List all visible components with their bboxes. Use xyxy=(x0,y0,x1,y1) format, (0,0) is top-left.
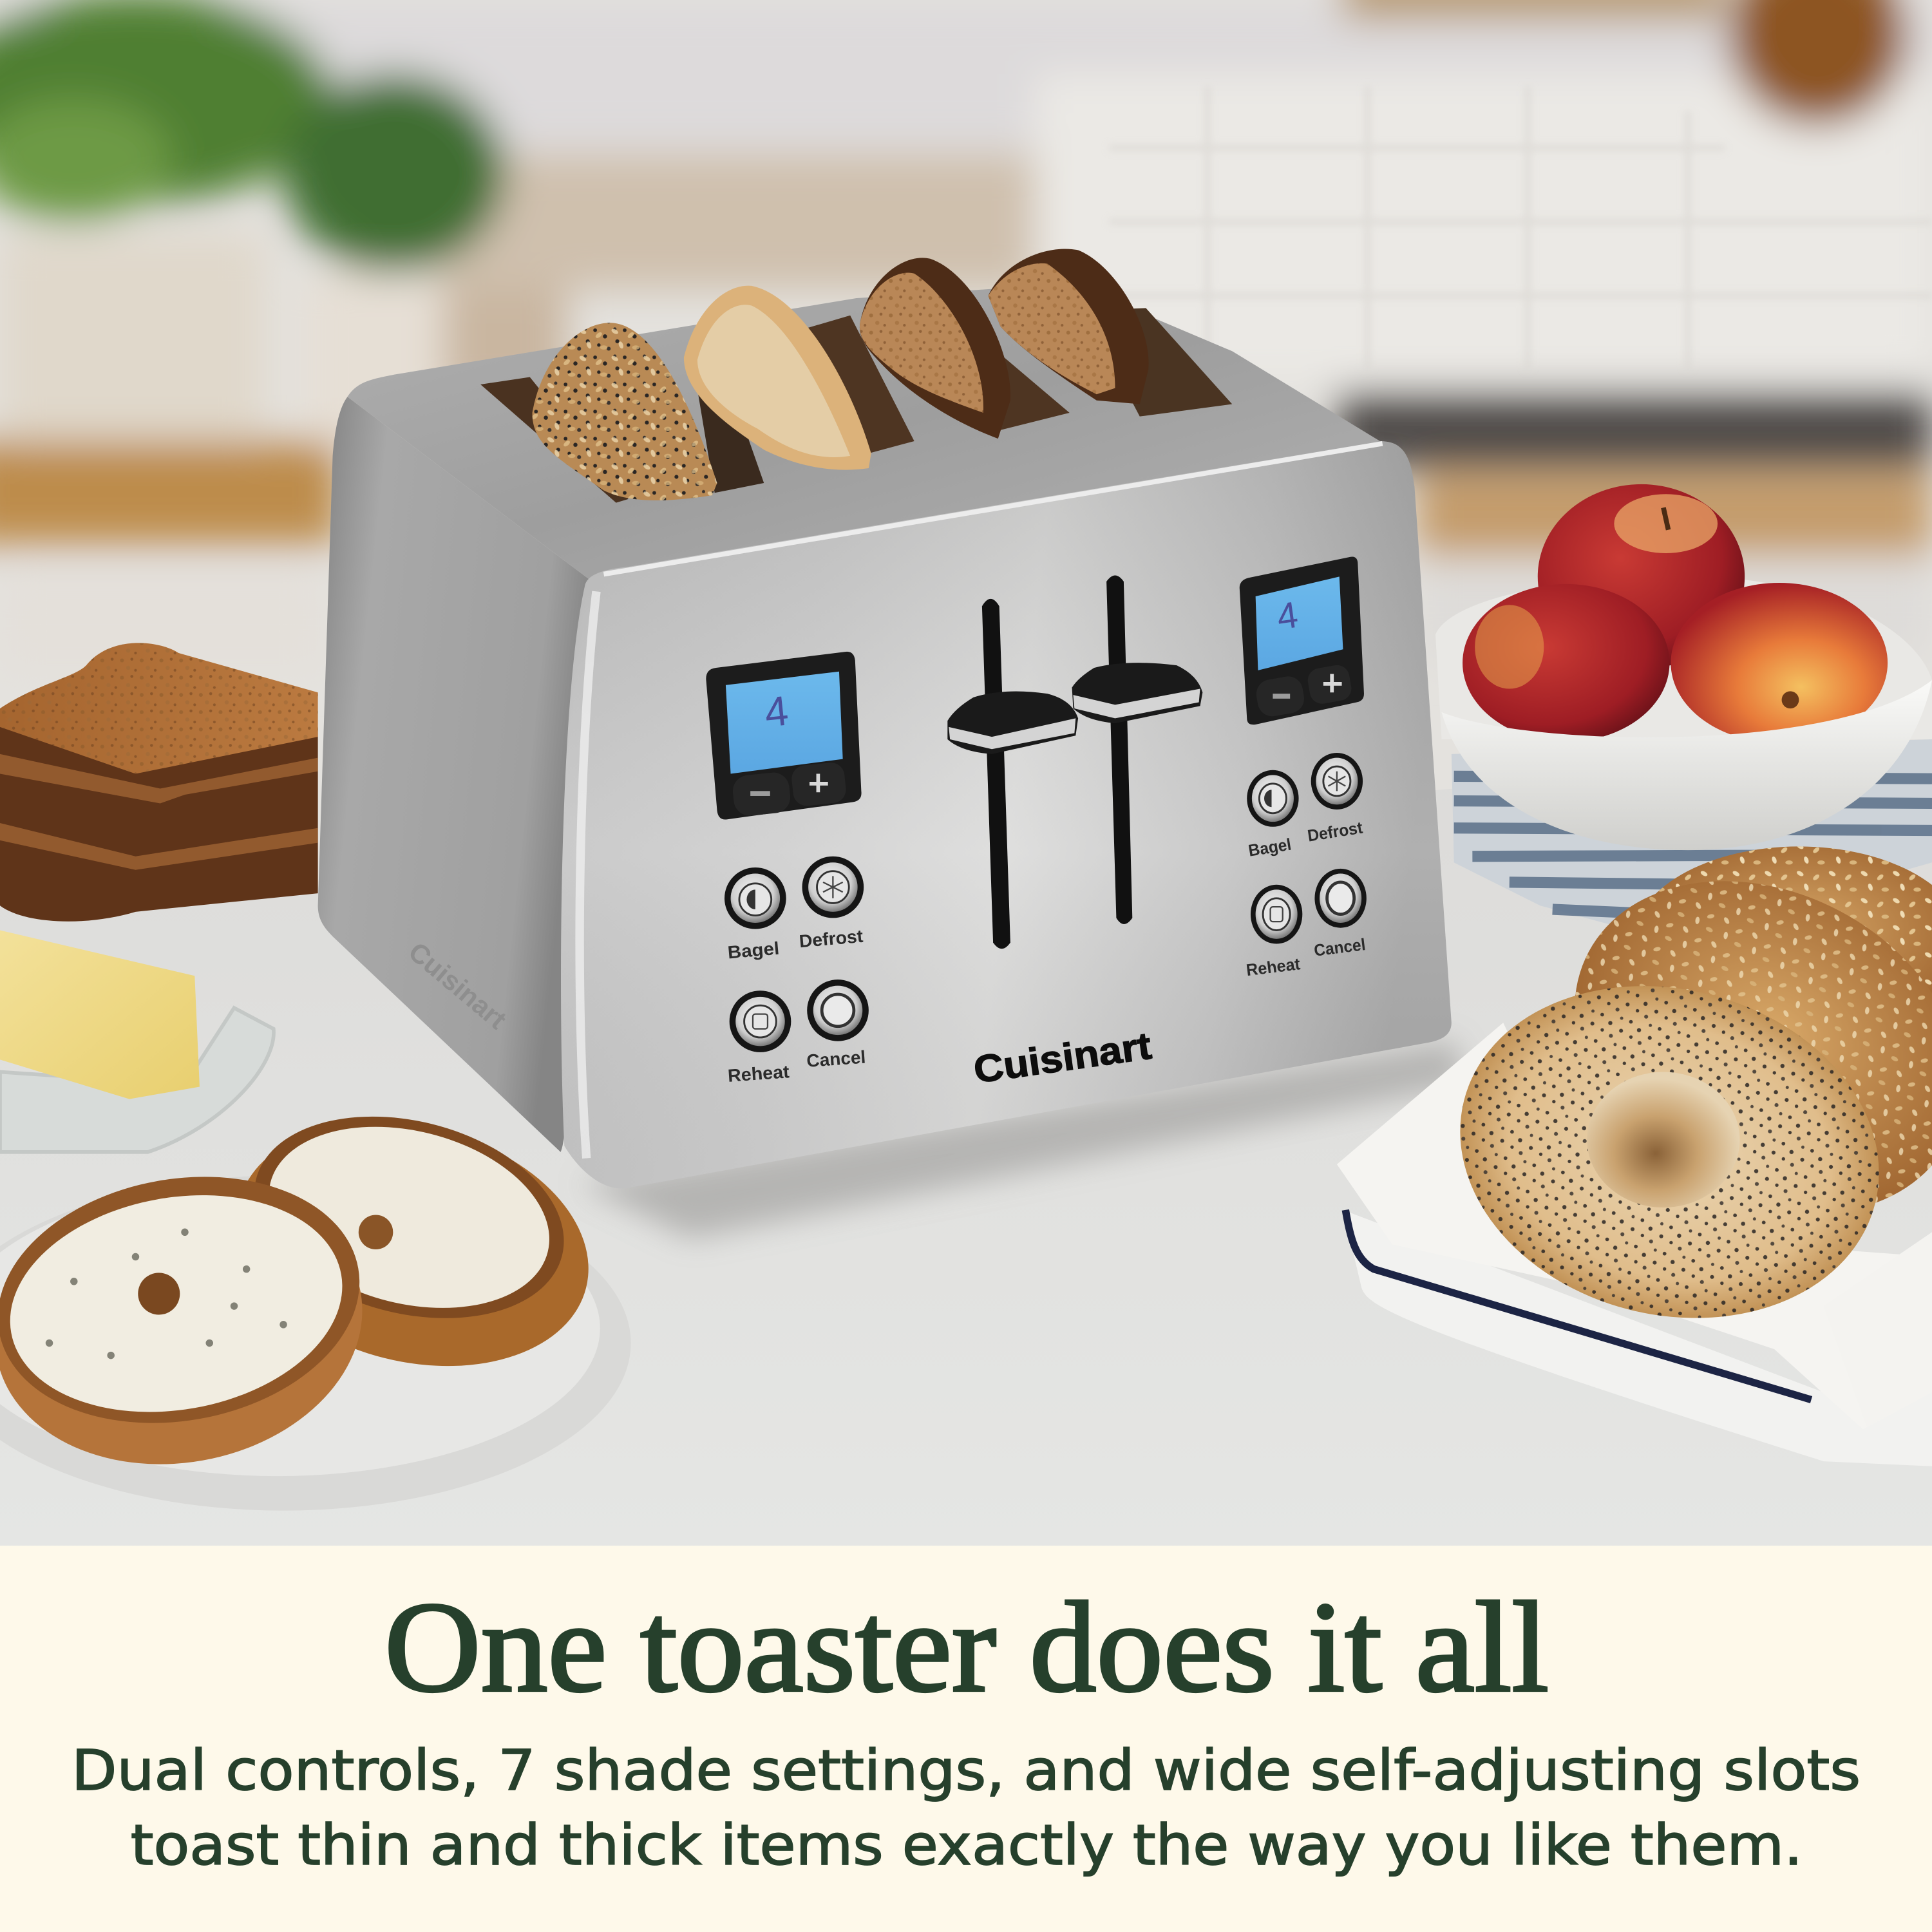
subtitle line 1: Dual controls, 7 shade settings, and wide self-adjusting slots xyxy=(71,1739,1861,1803)
front corner highlight xyxy=(580,591,596,1158)
right display module xyxy=(1240,557,1364,724)
control labels: Bagel xyxy=(1247,836,1293,860)
right Cancel button xyxy=(1314,869,1367,928)
bowl back xyxy=(1435,576,1932,739)
lever handle right xyxy=(1072,663,1202,723)
control labels: Defrost xyxy=(1306,819,1364,846)
left display module xyxy=(706,652,862,820)
left Bagel button xyxy=(724,867,786,929)
countertop xyxy=(0,739,1932,1553)
stack of toast xyxy=(0,643,318,922)
right Defrost button xyxy=(1311,753,1363,810)
slots xyxy=(480,308,1232,503)
left Cancel button xyxy=(807,980,869,1041)
nectarine: left xyxy=(1463,584,1669,742)
left plus button xyxy=(790,761,848,807)
nectarine: top xyxy=(1538,484,1745,669)
Cuisinart logo: Cuisinart xyxy=(971,1024,1154,1092)
wall tiles xyxy=(1109,86,1932,370)
parchment corner xyxy=(1824,1232,1932,1427)
control labels: Cancel xyxy=(1313,936,1367,960)
right Reheat button xyxy=(1251,885,1302,944)
poppy seed bagel xyxy=(1425,943,1915,1361)
right LCD digit: 4 xyxy=(1274,594,1300,638)
left Reheat button xyxy=(730,990,791,1052)
butter dish xyxy=(0,931,274,1152)
toaster front panel xyxy=(561,441,1452,1188)
toaster side panel xyxy=(318,397,589,1152)
lever slot left xyxy=(982,599,1010,949)
toaster shadow xyxy=(579,1041,1466,1238)
top edge highlight xyxy=(604,444,1383,574)
toaster side logo: Cuisinart xyxy=(403,936,513,1035)
right plus button xyxy=(1306,663,1353,706)
plate xyxy=(0,1175,631,1511)
title: One toaster does it all xyxy=(384,1576,1549,1719)
subtitle line 2: toast thin and thick items exactly the way you like them. xyxy=(131,1814,1803,1878)
toaster top panel xyxy=(348,283,1380,579)
nectarine: right xyxy=(1671,583,1888,743)
right minus button xyxy=(1254,674,1307,719)
right Bagel button xyxy=(1247,770,1299,827)
wheat slice 3 xyxy=(860,258,1010,439)
left LCD digit: 4 xyxy=(762,687,791,736)
control labels: Reheat xyxy=(727,1061,790,1086)
sesame bagels (back) xyxy=(1517,816,1932,1279)
left minus button xyxy=(731,771,792,817)
bowl of nectarines xyxy=(1435,484,1932,850)
bagel slice 1 xyxy=(533,323,717,500)
white enamel tray xyxy=(1343,1210,1932,1466)
lever slot right xyxy=(1106,575,1132,924)
control labels: Cancel xyxy=(806,1047,866,1071)
bagel half: left xyxy=(0,1150,384,1493)
bagel slice 2 xyxy=(684,286,871,470)
plate with bagels and cream cheese xyxy=(0,1086,631,1511)
left Defrost button xyxy=(802,857,864,918)
toaster xyxy=(318,249,1452,1188)
right LCD screen xyxy=(1256,576,1343,670)
control labels: Defrost xyxy=(799,926,864,951)
control labels xyxy=(727,819,1367,1086)
bagel half: right xyxy=(211,1086,614,1401)
left LCD screen xyxy=(726,672,843,774)
caption panel xyxy=(0,1546,1932,1932)
control labels: Bagel xyxy=(727,938,780,962)
lever handle left xyxy=(947,691,1078,754)
control labels: Reheat xyxy=(1245,955,1302,980)
parchment paper xyxy=(1337,1023,1932,1429)
striped towel xyxy=(1452,739,1932,939)
wheat slice 4 xyxy=(988,249,1149,404)
bowl front xyxy=(1442,680,1932,850)
